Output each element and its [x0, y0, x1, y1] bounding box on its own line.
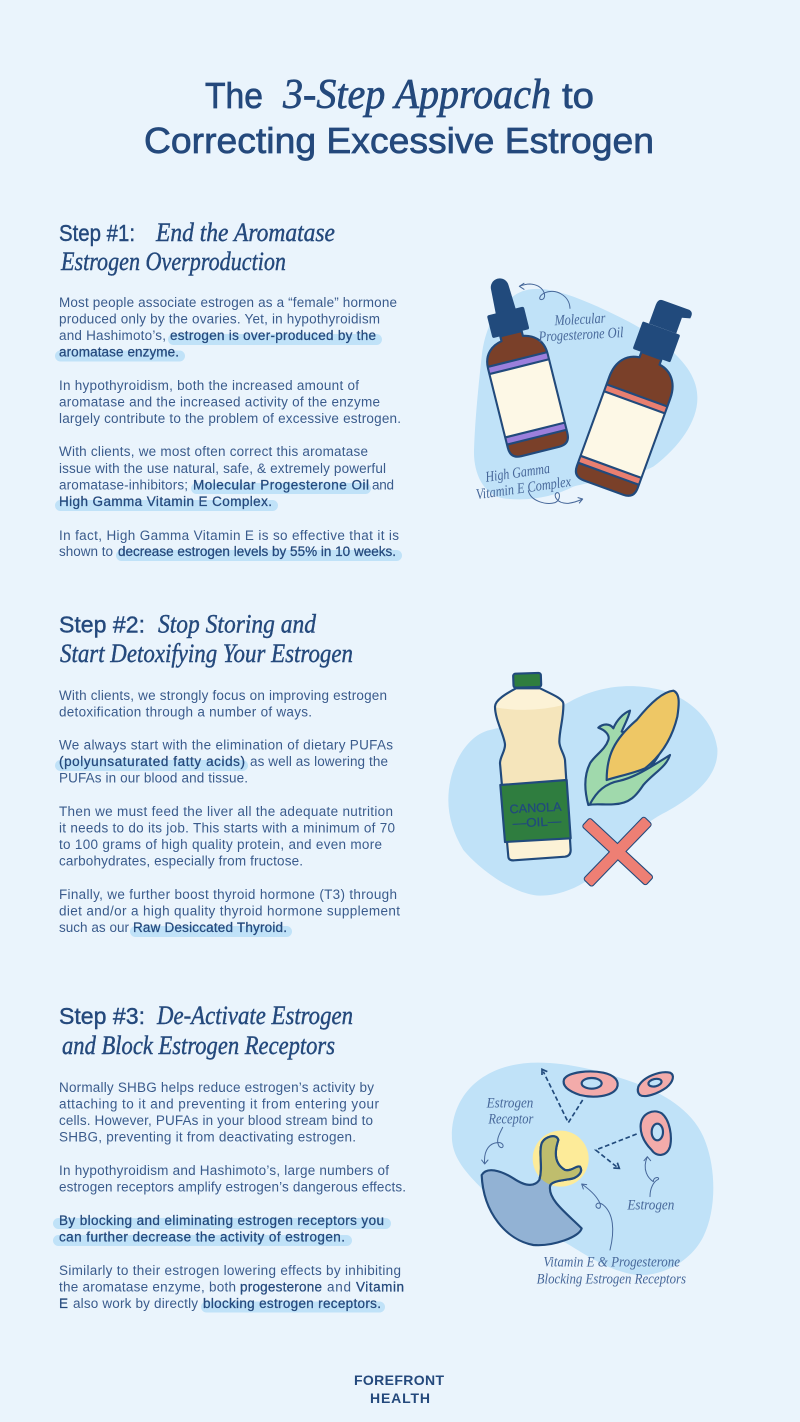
title: [144, 72, 654, 161]
text block: step 3 body: By blocking and eliminating estrogen receptors you: [59, 1213, 384, 1228]
label: molecular progesterone oil: Molecular: [553, 311, 606, 329]
text block: step 1 body: decrease estrogen levels by 55% in 10 weeks.: [118, 544, 396, 559]
label: estrogen receptor: Receptor: [488, 1111, 533, 1127]
illustration: estrogen receptor: [452, 1063, 713, 1287]
text block: step 3 body: progesterone: [240, 1280, 322, 1294]
heading: step 1: [59, 218, 335, 276]
label: blocking: Vitamin E & Progesterone: [543, 1255, 680, 1271]
text block: step 1 body: aromatase-inhibitors;: [59, 478, 188, 492]
text block: step 3 body: [53, 1080, 406, 1312]
text block: step 1 body: With clients, we most often correct this aromatase: [59, 444, 368, 459]
logo: [354, 1372, 444, 1406]
icon: canola oil bottle: [495, 673, 571, 860]
text block: step 3 body: attaching to it and preventing it from entering your: [59, 1096, 380, 1112]
title: to: [562, 75, 594, 116]
text block: step 2 body: carbohydrates, especially from fructose.: [59, 854, 303, 868]
label: blocking: Blocking Estrogen Receptors: [537, 1271, 686, 1287]
heading: step 2: Step #2:: [59, 612, 145, 638]
title: 3-Step Approach: [282, 72, 551, 118]
text block: step 1 body: and Hashimoto’s,: [59, 328, 166, 343]
text block: step 1 body: Most people associate estrogen as a “female” hormone: [59, 295, 397, 310]
blob: [448, 686, 717, 896]
arrow: progesterone label: [519, 283, 570, 308]
text block: step 1 body: High Gamma Vitamin E Complex.: [59, 494, 272, 509]
text block: step 2 body: as well as lowering the: [250, 754, 388, 769]
text block: step 2 body: PUFAs in our blood and tissue.: [59, 770, 248, 786]
text block: step 2 body: We always start with the elimination of dietary PUFAs: [59, 738, 393, 752]
text block: step 3 body: cells. However, PUFAs in your blood stream bind to: [59, 1113, 373, 1128]
infographic canvas: [53, 78, 718, 1403]
text block: step 1 body: Molecular Progesterone Oil: [193, 478, 369, 492]
label: high gamma vitamin e complex: Vitamin E Complex: [475, 474, 572, 503]
heading: step 2: [59, 610, 353, 668]
text block: step 2 body: [55, 688, 400, 937]
logo: HEALTH: [370, 1390, 430, 1406]
text block: step 3 body: blocking estrogen receptors.: [203, 1296, 381, 1311]
text block: step 1 body: produced only by the ovaries. Yet, in hypothyroidism: [59, 312, 380, 327]
text block: step 3 body: In hypothyroidism and Hashimoto’s, large numbers of: [59, 1163, 389, 1178]
icon: corn: [585, 691, 679, 805]
arrows: dashed deflection: [542, 1069, 637, 1168]
blob: [474, 289, 697, 499]
text block: step 3 body: Vitamin: [356, 1280, 404, 1294]
text block: step 3 body: can further decrease the activity of estrogen.: [59, 1230, 345, 1244]
panel: step 2: [55, 610, 717, 937]
arrow: receptor label: [482, 1127, 503, 1164]
heading: step 1: End the Aromatase: [155, 218, 335, 247]
text block: step 2 body: Finally, we further boost thyroid hormone (T3) through: [59, 887, 397, 902]
illustration: oil bottles: [468, 271, 701, 503]
text block: step 1 body: [55, 295, 402, 561]
text block: step 2 body: such as our: [59, 920, 130, 935]
arrow: vitamin e label: [528, 491, 583, 503]
text block: step 2 body: diet and/or a high quality thyroid hormone supplement: [59, 904, 400, 918]
text block: step 3 body: Similarly to their estrogen lowering effects by inhibiting: [59, 1263, 401, 1278]
text block: step 2 body: it needs to do its job. This starts with a minimum of 70: [59, 820, 395, 836]
text block: step 3 body: the aromatase enzyme, both: [59, 1280, 236, 1294]
text block: step 3 body: also work by directly: [73, 1296, 198, 1311]
text block: step 2 body: to 100 grams of high quality protein, and even more: [59, 837, 382, 852]
blob: [452, 1063, 713, 1275]
title: Correcting Excessive Estrogen: [144, 120, 654, 161]
text block: step 3 body: and: [327, 1280, 351, 1294]
label: high gamma vitamin e complex: High Gamma: [484, 461, 551, 486]
label: canola oil: [509, 800, 563, 831]
icon: red x: [583, 817, 653, 886]
label: canola oil: CANOLA: [509, 800, 563, 816]
label: canola oil: —OIL—: [512, 814, 562, 831]
label: blocking: [537, 1255, 686, 1287]
icon: receptor: [482, 1136, 582, 1245]
illustration: canola oil and corn: [448, 673, 717, 896]
logo: FOREFRONT: [354, 1372, 444, 1388]
text block: step 1 body: In fact, High Gamma Vitamin E is so effective that it is: [59, 528, 399, 543]
text block: step 3 body: E: [59, 1296, 68, 1311]
text block: step 1 body: aromatase enzyme.: [59, 345, 179, 360]
icon: estrogen molecules: [564, 1071, 673, 1155]
panel: step 1: [55, 218, 701, 561]
text block: step 2 body: Raw Desiccated Thyroid.: [133, 920, 287, 935]
label: estrogen: Estrogen: [626, 1197, 674, 1213]
heading: step 1: Step #1:: [59, 220, 135, 246]
label: molecular progesterone oil: Progesterone Oil: [537, 325, 624, 346]
text block: step 2 body: With clients, we strongly focus on improving estrogen: [59, 688, 387, 703]
text block: step 2 body: Then we must feed the liver all the adequate nutrition: [59, 804, 393, 819]
heading: step 3: and Block Estrogen Receptors: [62, 1031, 335, 1060]
arrow: vitamin label: [582, 1184, 613, 1250]
text block: step 2 body: detoxification through a number of ways.: [59, 704, 312, 720]
text block: step 1 body: In hypothyroidism, both the increased amount of: [59, 378, 359, 393]
text block: step 1 body: aromatase and the increased activity of the enzyme: [59, 394, 380, 410]
heading: step 3: De-Activate Estrogen: [156, 1001, 353, 1030]
text block: step 1 body: issue with the use natural, safe, & extremely powerful: [59, 461, 386, 476]
label: estrogen receptor: [486, 1095, 533, 1127]
text block: step 2 body: (polyunsaturated fatty acids): [59, 754, 245, 769]
text block: step 1 body: estrogen is over-produced by the: [170, 328, 376, 343]
text block: step 3 body: Normally SHBG helps reduce estrogen’s activity by: [59, 1080, 374, 1095]
label: high gamma vitamin e complex: [473, 458, 572, 503]
arrow: estrogen label: [644, 1157, 659, 1197]
title: The: [205, 75, 263, 116]
heading: step 3: [59, 1001, 353, 1060]
panel: step 3: [53, 1001, 713, 1312]
heading: step 2: Stop Storing and: [158, 610, 317, 638]
text block: step 1 body: largely contribute to the problem of excessive estrogen.: [59, 411, 401, 426]
icon: blocker circle: [533, 1131, 589, 1187]
text block: step 1 body: and: [372, 478, 394, 492]
heading: step 1: Estrogen Overproduction: [60, 247, 286, 276]
icon: pump bottle: [573, 292, 701, 499]
heading: step 2: Start Detoxifying Your Estrogen: [60, 639, 353, 668]
text block: step 1 body: shown to: [59, 544, 113, 559]
text block: step 3 body: SHBG, preventing it from deactivating estrogen.: [59, 1130, 356, 1144]
label: estrogen receptor: Estrogen: [486, 1095, 533, 1111]
icon: dropper bottle: [468, 271, 570, 459]
heading: step 3: Step #3:: [59, 1003, 145, 1029]
text block: step 3 body: estrogen receptors amplify estrogen’s dangerous effects.: [59, 1180, 406, 1194]
label: molecular progesterone oil: [537, 310, 624, 346]
